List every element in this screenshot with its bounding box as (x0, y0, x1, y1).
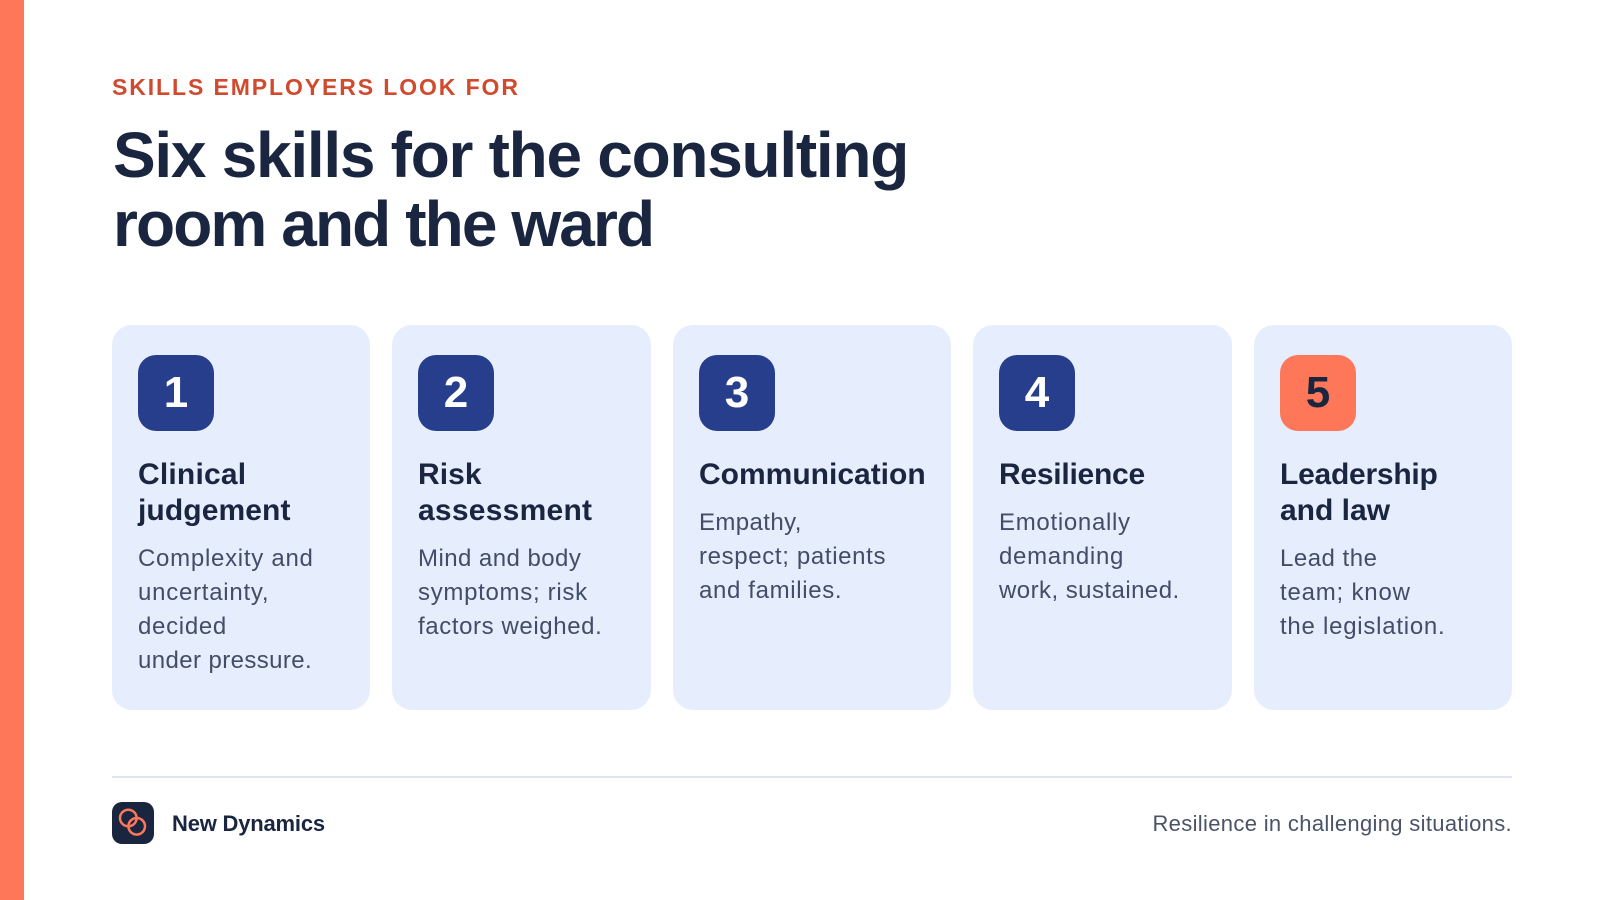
description (1280, 545, 1445, 640)
description: symptoms; risk (418, 579, 588, 606)
badge 3 (699, 355, 775, 431)
brand name: New Dynamics (172, 811, 325, 836)
badge 1 (138, 355, 214, 431)
title (113, 119, 908, 260)
panel: resilience (973, 325, 1232, 710)
heading: Leadership (1280, 458, 1438, 491)
badge 5: 5 (1306, 368, 1330, 417)
heading: and law (1280, 494, 1390, 527)
badge 1: 1 (164, 368, 188, 417)
title: Six skills for the consulting (113, 119, 908, 191)
description: work, sustained. (999, 577, 1180, 604)
description: under pressure. (138, 647, 312, 674)
description: uncertainty, (138, 579, 269, 606)
eyebrow label: SKILLS EMPLOYERS LOOK FOR (112, 74, 520, 100)
badge 3: 3 (725, 368, 749, 417)
description (418, 545, 602, 640)
heading: judgement (138, 494, 291, 527)
description: respect; patients (699, 543, 886, 570)
panel: communication (673, 325, 951, 710)
description: Lead the (1280, 545, 1377, 572)
heading (418, 458, 592, 527)
heading (138, 458, 291, 527)
description (999, 509, 1180, 604)
description: and families. (699, 577, 842, 604)
logo icon (112, 802, 154, 844)
description (138, 545, 314, 674)
heading: Communication (699, 458, 926, 491)
description: Complexity and (138, 545, 314, 572)
heading: Resilience (999, 458, 1145, 491)
description: decided (138, 613, 227, 640)
panel: leadership and law (1254, 325, 1512, 710)
description (699, 509, 886, 604)
description: the legislation. (1280, 613, 1445, 640)
description: team; know (1280, 579, 1411, 606)
badge 4 (999, 355, 1075, 431)
description: Emotionally (999, 509, 1131, 536)
description: demanding (999, 543, 1124, 570)
description: Empathy, (699, 509, 802, 536)
badge 5 (1280, 355, 1356, 431)
description: factors weighed. (418, 613, 602, 640)
panel: clinical judgement (112, 325, 370, 710)
badge 2: 2 (444, 368, 468, 417)
badge 2 (418, 355, 494, 431)
accent bar (0, 0, 24, 900)
heading: Clinical (138, 458, 246, 491)
heading: Risk (418, 458, 482, 491)
heading: assessment (418, 494, 592, 527)
title: room and the ward (113, 188, 653, 260)
tagline: Resilience in challenging situations. (1152, 811, 1512, 836)
description: Mind and body (418, 545, 581, 572)
panel: risk assessment (392, 325, 651, 710)
heading (1280, 458, 1438, 527)
badge 4: 4 (1025, 368, 1049, 417)
